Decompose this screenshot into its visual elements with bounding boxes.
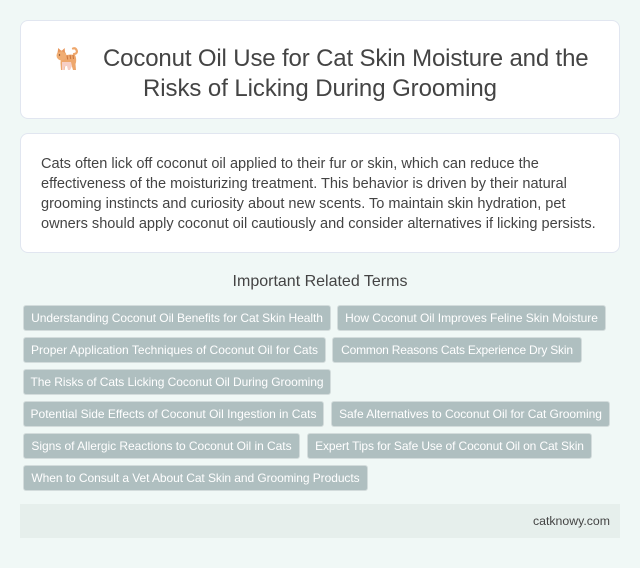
- title: [103, 45, 588, 102]
- tag: When to Consult a Vet About Cat Skin and Grooming Products: [31, 471, 360, 485]
- title: Coconut Oil Use for Cat Skin Moisture and the: [103, 45, 588, 72]
- description text: [41, 156, 596, 232]
- description text: Cats often lick off coconut oil applied to their fur or skin, which can reduce the: [41, 156, 539, 172]
- tag: Proper Application Techniques of Coconut Oil for Cats: [31, 343, 318, 357]
- tag: Common Reasons Cats Experience Dry Skin: [341, 343, 573, 357]
- description text: effectiveness of the moisturizing treatment. This behavior is driven by their natural: [41, 176, 567, 192]
- heading: related terms: Important Related Terms: [233, 273, 407, 290]
- tag: [331, 401, 610, 427]
- tag: [337, 305, 606, 331]
- tag: Safe Alternatives to Coconut Oil for Cat Grooming: [339, 407, 602, 421]
- title: Risks of Licking During Grooming: [143, 75, 497, 102]
- tag: [23, 305, 331, 331]
- tag: [332, 337, 582, 363]
- tag: Expert Tips for Safe Use of Coconut Oil on Cat Skin: [315, 439, 584, 453]
- tag: [307, 433, 592, 459]
- description text: owners should apply coconut oil cautiously and consider alternatives if licking persists.: [41, 216, 596, 232]
- panel: related term tags: [23, 305, 610, 491]
- description text: grooming instincts and curiosity about new scents. To maintain skin hydration, pet: [41, 196, 566, 212]
- tag: How Coconut Oil Improves Feline Skin Moisture: [345, 311, 598, 325]
- tag: [23, 433, 300, 459]
- panel: description: [20, 133, 620, 253]
- tag: [23, 401, 324, 427]
- tag: Potential Side Effects of Coconut Oil Ingestion in Cats: [31, 407, 316, 421]
- tag: [23, 465, 368, 491]
- tag: Understanding Coconut Oil Benefits for Cat Skin Health: [31, 311, 323, 325]
- tag: The Risks of Cats Licking Coconut Oil During Grooming: [31, 375, 323, 389]
- footer source text: catknowy.com: [533, 514, 610, 528]
- tag: [23, 337, 326, 363]
- footer bar: [20, 504, 620, 538]
- tag: Signs of Allergic Reactions to Coconut Oil in Cats: [31, 439, 292, 453]
- panel: title card: [20, 20, 620, 119]
- tag: [23, 369, 331, 395]
- icon: cat: [56, 47, 78, 70]
